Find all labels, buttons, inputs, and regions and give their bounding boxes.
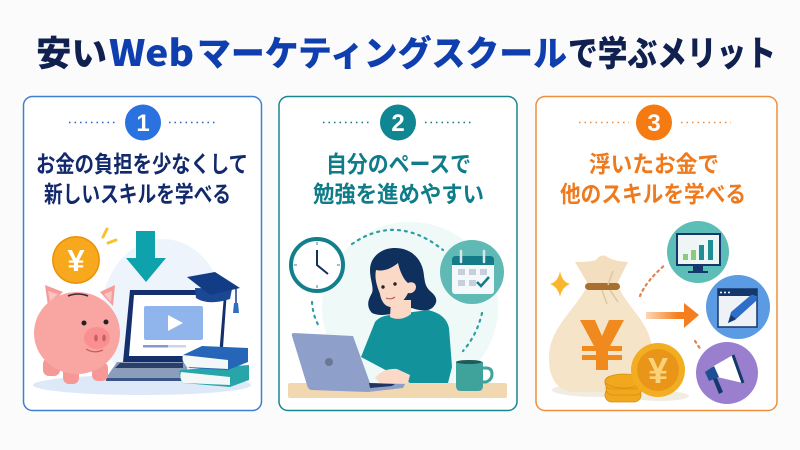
icon: mug	[456, 360, 492, 391]
icon: books	[179, 346, 249, 387]
icon: laptop	[106, 290, 227, 381]
number badge 3: 3	[647, 110, 661, 137]
icon: coins: ¥	[648, 350, 668, 391]
number badge 1: 1	[136, 110, 150, 137]
illustration: piggy bank and laptop	[33, 229, 251, 395]
illustration: money bag and skills	[549, 221, 770, 404]
table	[288, 383, 507, 398]
panel 2: own pace	[279, 96, 517, 410]
heading 1	[36, 145, 248, 209]
icon: arrow right	[646, 303, 699, 328]
icon: graduation cap	[187, 272, 240, 313]
heading 3: 他のスキルを学べる	[560, 175, 746, 209]
dotted connectors	[640, 264, 701, 350]
heading 1: 新しいスキルを学べる	[44, 175, 231, 209]
icon: megaphone	[696, 342, 758, 404]
number badge 3	[636, 104, 672, 140]
icon: calendar	[440, 240, 504, 304]
illustration: woman studying	[288, 222, 507, 398]
number badge 2	[380, 104, 416, 140]
number badge 2: 2	[391, 110, 405, 137]
icon: yen coin	[52, 229, 116, 284]
icon: piggy bank	[34, 285, 120, 384]
icon: writing window	[706, 275, 770, 339]
panel 3: other skills	[536, 96, 777, 410]
icon: sparkle	[550, 271, 570, 297]
dotted paths	[312, 230, 482, 351]
heading 3: 浮いたお金で	[589, 145, 719, 179]
icon: money bag	[549, 256, 652, 392]
icon: coins	[605, 343, 685, 402]
heading 2: 勉強を進めやすい	[313, 175, 484, 209]
number badge 1	[125, 104, 161, 140]
heading 2: 自分のペースで	[326, 145, 471, 179]
icon: laptop	[292, 333, 405, 392]
panel 1: save money	[24, 96, 262, 410]
title: Web	[109, 25, 194, 77]
heading 2	[313, 145, 484, 209]
title	[36, 25, 776, 77]
heading 1: お金の負担を少なくして	[36, 145, 248, 179]
title: 安い	[36, 26, 107, 77]
icon: down arrow	[126, 231, 166, 282]
heading 3	[560, 145, 746, 209]
icon: yen coin: ¥	[67, 243, 85, 278]
icon: woman	[361, 248, 452, 385]
icon: clock	[291, 239, 343, 291]
title: マーケティングスクール	[197, 26, 567, 77]
icon: monitor chart	[667, 221, 729, 283]
